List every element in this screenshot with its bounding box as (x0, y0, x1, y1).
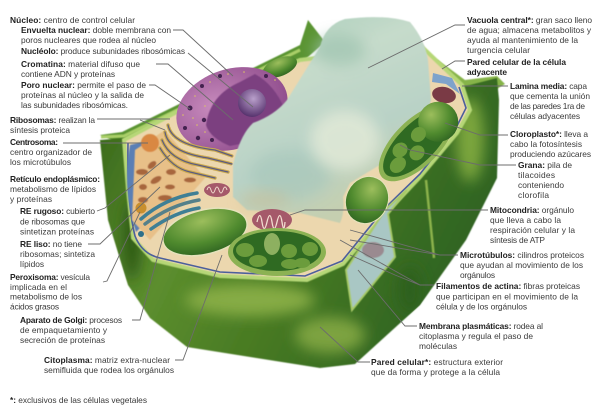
label: membrana plasmaticas: citoplasma y regula el paso de (419, 331, 533, 341)
label: reticulo endoplasmico: sintetizan proteínas (20, 226, 94, 236)
label: grana: clorofila (518, 190, 549, 200)
label: pared celular adyacente: Pared celular de la célula (467, 57, 566, 67)
label: aparato de golgi: de empaquetamiento y (20, 325, 108, 335)
blue cytosol edge (127, 140, 150, 232)
right chloroplast (366, 91, 469, 194)
label: filamentos de actina: que participan en el movimiento de la (436, 292, 578, 302)
labels: nucleus: Poro nuclear: permite el paso de (21, 80, 146, 90)
label: microtubulos (460, 250, 584, 280)
label: mitocondria: que lleva a cabo la (490, 215, 561, 225)
labels: nucleus (10, 15, 185, 110)
nucleus interior (206, 74, 285, 146)
red organelle (431, 85, 457, 105)
label: ribosomas (10, 115, 95, 135)
label: mitocondria (490, 205, 575, 245)
labels: nucleus: contiene ADN y proteínas (21, 69, 115, 79)
label: centrosoma (10, 137, 92, 167)
plasma membrane edge (128, 87, 466, 276)
label: pared celular adyacente (467, 57, 566, 77)
label: lamina media: Lamina media: capa (510, 81, 587, 91)
label: microtubulos: que ayudan al movimiento de los (460, 260, 583, 270)
label: pared celular: Pared celular*: estructura exterior (371, 357, 503, 367)
label: peroxisoma: metabolismo de los (10, 292, 82, 302)
labels: nucleus: Núcleo: centro de control celular (10, 15, 135, 25)
blue corner (432, 73, 460, 94)
label: reticulo endoplasmico: RE liso: no tiene (20, 239, 82, 249)
label: lamina media: que cementa la unión (510, 91, 590, 101)
nucleus (165, 53, 299, 165)
label: grana: conteniendo (518, 180, 564, 190)
label: mitocondria: síntesis de ATP (490, 235, 545, 245)
top green organelle (260, 52, 300, 82)
labels: nucleus: proteínas al núcleo y la salida de (21, 90, 144, 100)
label: filamentos de actina: Filamentos de actina: fibras proteicas (436, 281, 580, 291)
label: filamentos de actina: célula y de los orgánulos (436, 302, 527, 312)
label: reticulo endoplasmico: lípidos (20, 259, 44, 269)
label: microtubulos: orgánulos (460, 270, 495, 280)
label: vacuola central: Vacuola central*: gran saco lleno (467, 15, 592, 25)
labels: nucleus: Cromatina: material difuso que (21, 59, 140, 69)
label: reticulo endoplasmico (10, 174, 100, 269)
wall highlights (124, 98, 484, 353)
label: cloroplasto (510, 129, 591, 159)
cutaway window (346, 180, 434, 310)
nucleolus (238, 89, 266, 117)
label: centrosoma: Centrosoma: (10, 137, 58, 147)
label: vacuola central: ayuda al mantenimiento de la (467, 35, 578, 45)
labels: nucleus: Envuelta nuclear: doble membrana con (21, 25, 171, 35)
label: membrana plasmaticas (419, 321, 543, 351)
label: centrosoma: centro organizador de (10, 147, 92, 157)
label: ribosomas: Ribosomas: realizan la (10, 115, 95, 125)
label: ribosomas: síntesis proteica (10, 125, 70, 135)
label: reticulo endoplasmico: y proteínas (10, 194, 52, 204)
plant cell illustration (100, 17, 505, 368)
adjacent cell wall, top (100, 20, 505, 148)
label: reticulo endoplasmico: ribosomas; sintetiza (20, 249, 95, 259)
label: aparato de golgi: secreción de proteínas (20, 335, 105, 345)
label: citoplasma (44, 355, 174, 375)
label: membrana plasmaticas: Membrana plasmáticas: rodea al (419, 321, 543, 331)
label: grana (518, 160, 572, 200)
small mitochondrion (204, 183, 230, 197)
label: mitocondria: Mitocondria: orgánulo (490, 205, 574, 215)
label: filamentos de actina (436, 281, 580, 312)
label: reticulo endoplasmico: de ribosomas que (20, 216, 85, 226)
label: peroxisoma (10, 272, 90, 312)
label: reticulo endoplasmico: Retículo endoplásmico: (10, 174, 100, 184)
label: pared celular adyacente: adyacente (467, 67, 507, 77)
orange vesicle region (132, 130, 205, 240)
cytoplasm interior (124, 45, 470, 280)
label: vacuola central (467, 15, 592, 55)
Golgi apparatus (138, 193, 199, 237)
translucent central vacuole (233, 17, 431, 223)
label: lamina media: células adyacentes (510, 111, 580, 121)
label: vacuola central: turgencia celular (467, 45, 530, 55)
label: cloroplasto: cabo la fotosíntesis (510, 139, 582, 149)
label: reticulo endoplasmico: metabolismo de lípidos (10, 184, 96, 194)
labels: nucleus: Nucléolo: produce subunidades ribosómicas (21, 46, 185, 56)
large mitochondrion (252, 209, 292, 231)
label: peroxisoma: implicada en el (10, 282, 67, 292)
label: aparato de golgi (20, 315, 122, 345)
label: vacuola central: de agua; almacena metabolitos y (467, 25, 592, 35)
label: microtubulos: Microtúbulos: cilindros proteicos (460, 250, 584, 260)
label: mitocondria: respiración celular y la (490, 225, 575, 235)
label: citoplasma: semifluida que rodea los orgánulos (44, 365, 174, 375)
label: lamina media: de las paredes 1ra de (510, 101, 585, 111)
label: cloroplasto: Cloroplasto*: lleva a (510, 129, 588, 139)
label: pared celular: que da forma y protege a la célula (371, 367, 500, 377)
label: cloroplasto: produciendo azúcares (510, 149, 591, 159)
footnote: *: exclusivos de las células vegetales (10, 395, 147, 405)
label: reticulo endoplasmico: RE rugoso: cubierto (20, 206, 95, 216)
large green organelle (158, 200, 252, 264)
leader lines (63, 25, 516, 362)
label: citoplasma: Citoplasma: matriz extra-nuclear (44, 355, 170, 365)
label: pared celular (371, 357, 503, 377)
lower chloroplast (228, 228, 326, 276)
cell wall block (100, 78, 499, 368)
label: peroxisoma: ácidos grasos (10, 302, 59, 312)
label: aparato de golgi: Aparato de Golgi: procesos (20, 315, 122, 325)
label: grana: Grana: pila de (518, 160, 572, 170)
label: membrana plasmaticas: moléculas (419, 341, 457, 351)
rough endoplasmic reticulum (160, 125, 232, 178)
peroxisome (136, 202, 146, 214)
label: grana: tilacoides (518, 170, 555, 180)
labels: nucleus: las subunidades ribosómicas. (21, 100, 128, 110)
label: centrosoma: los microtúbulos (10, 157, 71, 167)
right green organelle (338, 169, 396, 231)
labels: nucleus: poros nucleares que rodea al núcleo (21, 35, 156, 45)
nuclear pores (183, 74, 268, 142)
label: lamina media (510, 81, 590, 121)
nuclear dots (182, 71, 276, 133)
label: peroxisoma: Peroxisoma: vesícula (10, 272, 90, 282)
